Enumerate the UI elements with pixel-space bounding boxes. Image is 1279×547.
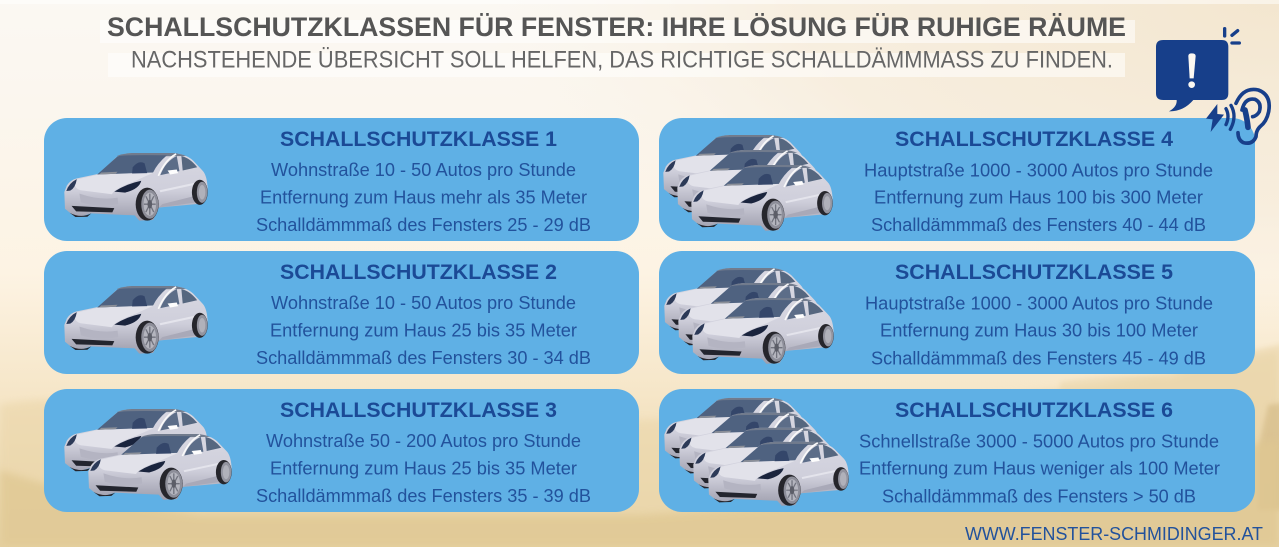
panel: Schallschutzklasse 3: Schalldämmmaß des Fensters 35 - 39 dB (256, 485, 591, 506)
panel: Schallschutzklasse 2: Wohnstraße 10 - 50 Autos pro Stunde (271, 292, 576, 313)
panel: Schallschutzklasse 3: Wohnstraße 50 - 200 Autos pro Stunde (266, 430, 581, 451)
panel: Schallschutzklasse 3: Entfernung zum Haus 25 bis 35 Meter (270, 458, 577, 478)
panel: Schallschutzklasse 4: Hauptstraße 1000 - 3000 Autos pro Stunde (864, 160, 1213, 180)
panel: Schallschutzklasse 2: Entfernung zum Haus 25 bis 35 Meter (270, 320, 577, 340)
subtitle: NACHSTEHENDE ÜBERSICHT SOLL HELFEN, DAS RICHTIGE SCHALLDÄMMMASS ZU FINDEN. (131, 46, 1113, 74)
panel: Schallschutzklasse 5: SCHALLSCHUTZKLASSE 5 (895, 261, 1173, 284)
panel: Schallschutzklasse 2: Schalldämmmaß des Fensters 30 - 34 dB (256, 347, 591, 368)
panel: Schallschutzklasse 6: SCHALLSCHUTZKLASSE 6 (895, 399, 1173, 422)
subtitle strip (108, 53, 1125, 77)
website url: WWW.FENSTER-SCHMIDINGER.AT (965, 523, 1263, 544)
panel: Schallschutzklasse 1: SCHALLSCHUTZKLASSE 1 (280, 128, 557, 151)
panel: Schallschutzklasse 5 (659, 251, 1255, 374)
panel: Schallschutzklasse 5: Entfernung zum Haus 30 bis 100 Meter (880, 320, 1198, 340)
panel: Schallschutzklasse 1: Entfernung zum Haus mehr als 35 Meter (260, 186, 587, 208)
panel: Schallschutzklasse 4 (659, 118, 1255, 241)
icon: speech bubble with ear (1156, 29, 1269, 143)
panel: Schallschutzklasse 6: Schalldämmmaß des Fensters > 50 dB (882, 486, 1196, 506)
panel: Schallschutzklasse 2 (44, 251, 639, 374)
panel: Schallschutzklasse 2: SCHALLSCHUTZKLASSE 2 (280, 261, 557, 284)
panel: Schallschutzklasse 6: Schnellstraße 3000 - 5000 Autos pro Stunde (859, 430, 1219, 452)
panel: Schallschutzklasse 3: SCHALLSCHUTZKLASSE 3 (280, 399, 557, 422)
panel: Schallschutzklasse 5: Hauptstraße 1000 - 3000 Autos pro Stunde (865, 292, 1213, 314)
panel: Schallschutzklasse 6 (659, 389, 1255, 512)
panel: Schallschutzklasse 4: SCHALLSCHUTZKLASSE 4 (895, 128, 1173, 151)
panel: Schallschutzklasse 4: Schalldämmmaß des Fensters 40 - 44 dB (871, 214, 1206, 235)
panel: Schallschutzklasse 3 (44, 389, 639, 512)
panel: Schallschutzklasse 6: Entfernung zum Haus weniger als 100 Meter (859, 458, 1220, 478)
panel: Schallschutzklasse 5: Schalldämmmaß des Fensters 45 - 49 dB (871, 348, 1206, 368)
panel: Schallschutzklasse 1: Schalldämmmaß des Fensters 25 - 29 dB (256, 214, 591, 235)
title: SCHALLSCHUTZKLASSEN FÜR FENSTER: IHRE LÖSUNG FÜR RUHIGE RÄUME (107, 12, 1126, 42)
panel: Schallschutzklasse 1 (44, 118, 639, 241)
panel: Schallschutzklasse 1: Wohnstraße 10 - 50 Autos pro Stunde (271, 159, 576, 180)
title strip (100, 20, 1135, 43)
panel: Schallschutzklasse 4: Entfernung zum Haus 100 bis 300 Meter (874, 186, 1203, 208)
